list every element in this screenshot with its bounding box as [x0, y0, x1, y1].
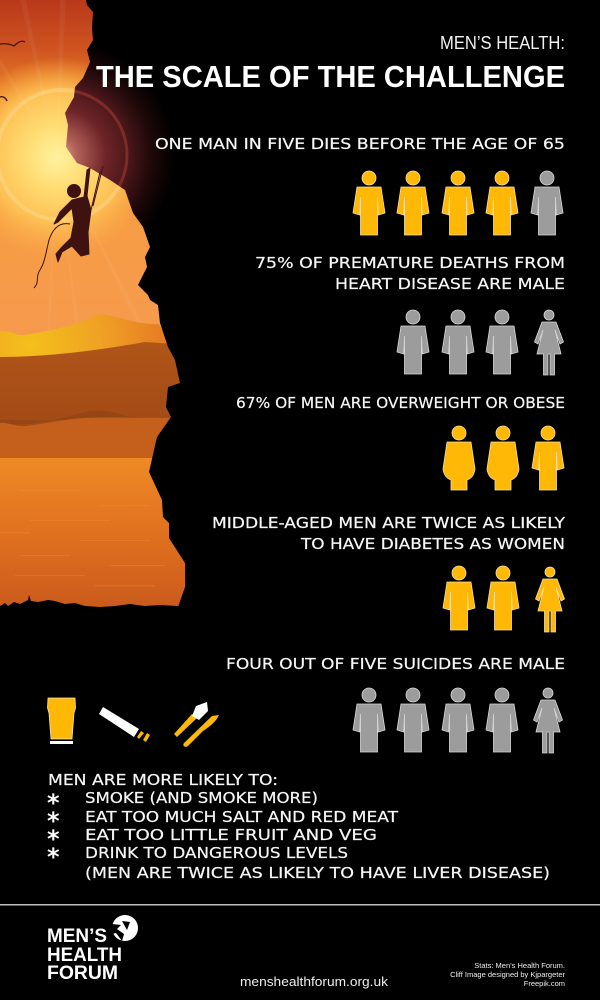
cliff silhouette with glow [65, 0, 200, 613]
icon: knife and fork [174, 702, 219, 747]
mid mountain [0, 342, 190, 430]
stat 3 text: 67% OF MEN ARE OVERWEIGHT OR OBESE [236, 394, 565, 412]
logo wordmark: HEALTH [47, 945, 122, 966]
mid mountain hump [0, 410, 172, 424]
climber [34, 166, 103, 288]
stat 4 text: TO HAVE DIABETES AS WOMEN [300, 535, 565, 553]
birds [0, 41, 25, 101]
credits [450, 961, 565, 988]
water [0, 458, 200, 613]
stat 2 pictogram [397, 310, 564, 375]
stat 4 pictogram [443, 566, 564, 632]
stat 3 pictogram [443, 426, 564, 490]
logo: Men's Health Forum [47, 915, 138, 984]
list: men are more likely to: (MEN ARE TWICE AS LIKELY TO HAVE LIVER DISEASE) [85, 864, 550, 882]
stat 2 text: 75% OF PREMATURE DEATHS FROM [255, 254, 565, 272]
credits: Freepik.com [524, 979, 565, 988]
list: men are more likely to: * [47, 789, 60, 817]
sun rays [0, 0, 146, 460]
stat 4 [212, 514, 566, 632]
stat 2 text: HEART DISEASE ARE MALE [335, 275, 565, 293]
stat 2 [255, 254, 565, 375]
stat 3 [236, 394, 565, 490]
logo wordmark: MEN’S [47, 926, 107, 947]
stat 4 text [212, 514, 566, 553]
list: men are more likely to: SMOKE (AND SMOKE MORE) [85, 789, 318, 807]
website url: menshealthforum.org.uk [240, 974, 389, 989]
stat 2 text [255, 254, 565, 293]
cliff halo ring [74, 90, 128, 187]
list: men are more likely to: EAT TOO LITTLE FRUIT AND VEG [85, 826, 377, 844]
far mountain [0, 314, 175, 362]
stat 5 pictogram [353, 688, 562, 753]
stat 1 pictogram [353, 171, 563, 235]
logo wordmark: FORUM [47, 963, 118, 984]
sun glow [0, 57, 157, 257]
list: men are more likely to: EAT TOO MUCH SALT AND RED MEAT [85, 808, 399, 826]
stat 4 text: MIDDLE-AGED MEN ARE TWICE AS LIKELY [212, 514, 566, 532]
list: men are more likely to: * [47, 825, 60, 853]
list: men are more likely to: MEN ARE MORE LIKELY TO: [48, 771, 278, 789]
kicker: MEN’S HEALTH: [440, 33, 565, 53]
stat 5 text: FOUR OUT OF FIVE SUICIDES ARE MALE [226, 655, 565, 673]
logo emblem [112, 915, 138, 941]
list: men are more likely to: * [47, 807, 60, 835]
logo wordmark [47, 926, 122, 984]
title block [96, 33, 565, 94]
stat 5 [226, 655, 565, 753]
water ripples [0, 490, 165, 586]
list: men are more likely to: * [47, 843, 60, 871]
main title: THE SCALE OF THE CHALLENGE [96, 59, 565, 94]
shore [0, 418, 190, 458]
list: men are more likely to [47, 771, 550, 882]
grass foreground [0, 595, 178, 625]
credits: Stats: Men’s Health Forum. [474, 961, 565, 970]
list: men are more likely to: DRINK TO DANGEROUS LEVELS [85, 844, 348, 862]
stat 1 text: ONE MAN IN FIVE DIES BEFORE THE AGE OF 65 [155, 135, 565, 153]
sun halo ring [0, 90, 127, 220]
icon: cigarette [99, 707, 150, 742]
sky [0, 0, 200, 350]
scene: sunset cliff illustration [0, 0, 185, 607]
stat 1 [155, 135, 565, 235]
credits: Cliff Image designed by Kjpargeter [450, 970, 565, 979]
icon: pint glass [48, 698, 76, 744]
